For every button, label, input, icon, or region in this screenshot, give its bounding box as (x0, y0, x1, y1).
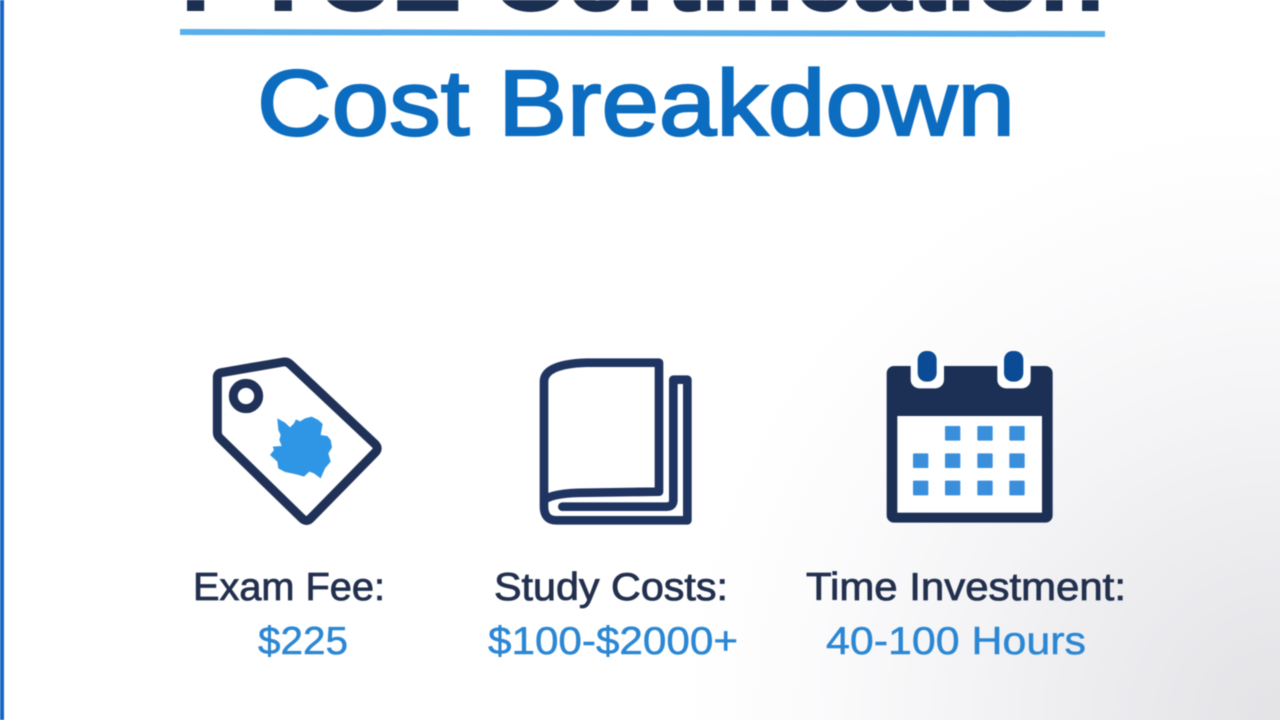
label: study costs (488, 566, 738, 663)
label: time investment (806, 566, 1126, 663)
label: time investment: 40-100 Hours (826, 620, 1086, 663)
icon: calendar (887, 351, 1053, 523)
left accent bar (0, 0, 4, 720)
title underline (180, 29, 1105, 37)
label: study costs: Study Costs: (494, 566, 728, 609)
label: exam fee: Exam Fee: (193, 566, 385, 609)
label: exam fee: $225 (258, 620, 348, 663)
icon: book (544, 363, 687, 520)
label: exam fee (193, 566, 385, 663)
icon: price tag (217, 362, 377, 520)
subtitle: Cost Breakdown (257, 51, 1015, 155)
label: study costs: $100-$2000+ (488, 620, 738, 663)
label: time investment: Time Investment: (806, 566, 1126, 609)
